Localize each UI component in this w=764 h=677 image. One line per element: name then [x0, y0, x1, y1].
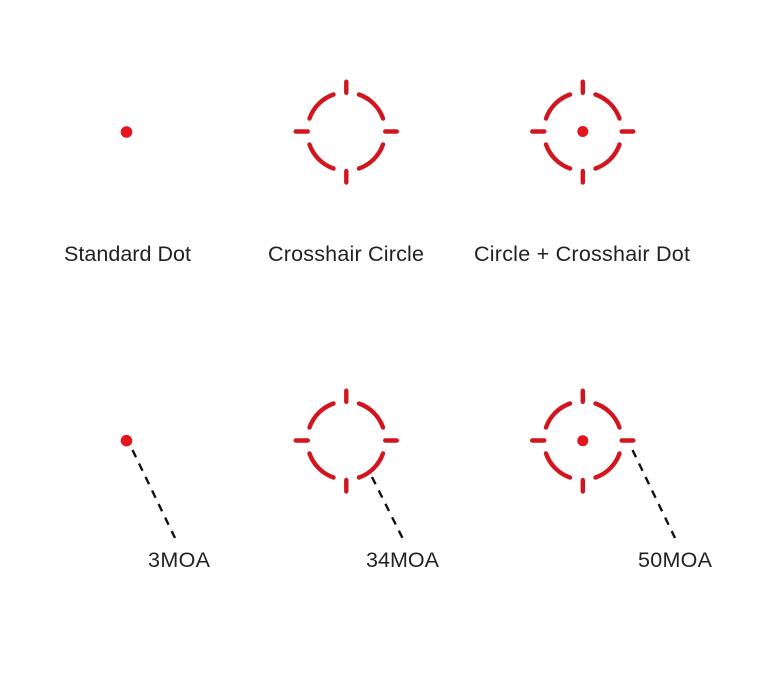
leader line: 34MOA	[372, 477, 402, 538]
label: 50MOA: 50MOA	[638, 548, 713, 572]
icon: 3MOA dot	[121, 435, 132, 447]
label: 34MOA: 34MOA	[366, 548, 440, 572]
icon: circle plus crosshair dot reticle	[532, 82, 633, 182]
label: Standard Dot: Standard Dot	[64, 242, 191, 266]
label: Crosshair Circle: Crosshair Circle	[268, 242, 424, 266]
icon: standard dot reticle	[121, 126, 132, 138]
icon: 50MOA crosshair dot	[532, 391, 633, 492]
leader line: 50MOA	[632, 450, 675, 538]
icon: crosshair circle reticle	[296, 82, 397, 182]
label: Circle + Crosshair Dot: Circle + Crosshair Dot	[474, 242, 690, 266]
label: 3MOA: 3MOA	[148, 548, 211, 572]
icon: 34MOA crosshair circle	[296, 391, 397, 492]
leader line: 3MOA	[132, 450, 175, 538]
